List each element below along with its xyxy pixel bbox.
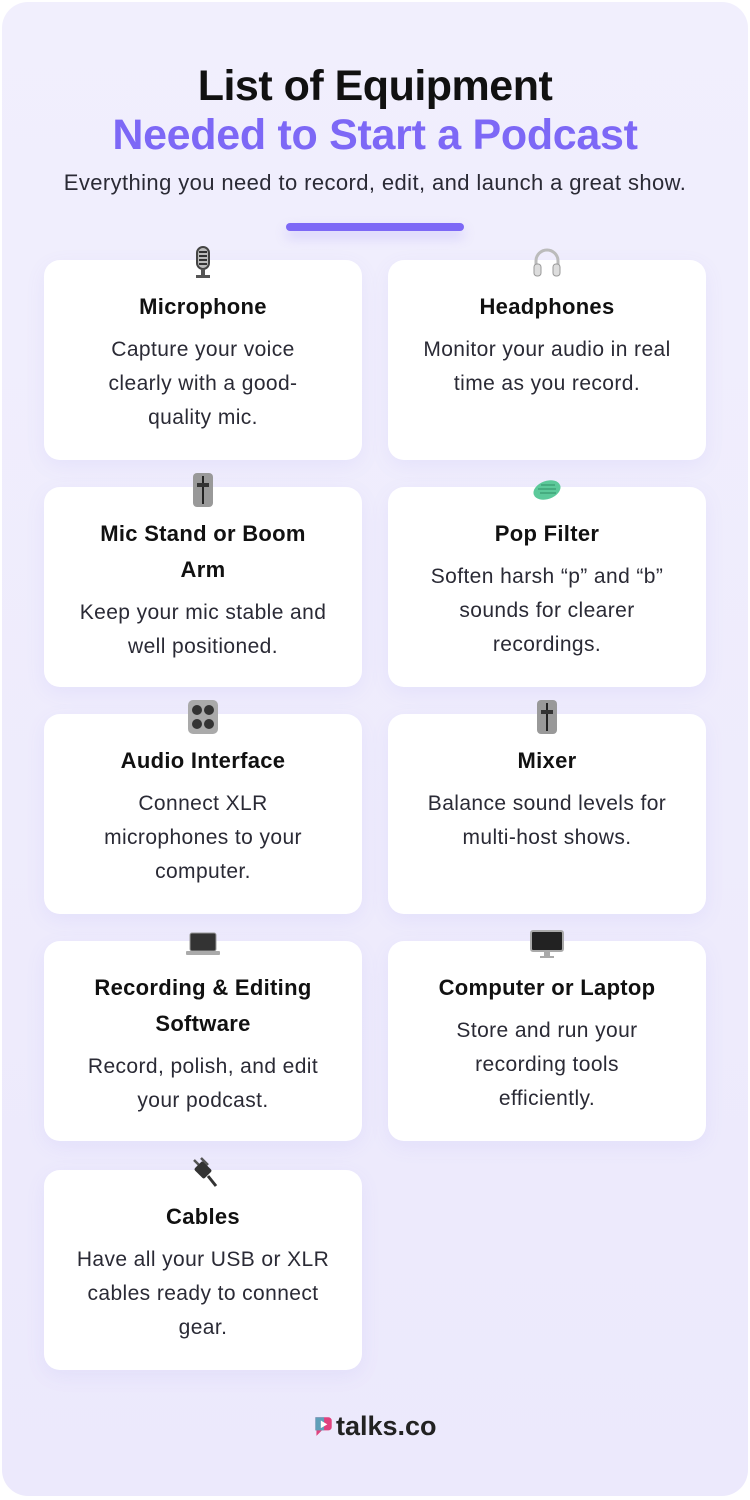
panel: computer: efficiently. [499, 1087, 595, 1110]
panel: cables: Have all your USB or XLR [77, 1248, 329, 1271]
panel: headphones [388, 260, 706, 460]
icon: desktop [530, 930, 564, 958]
panel: microphone: clearly with a good- [109, 372, 297, 395]
panel: microphone [44, 260, 362, 460]
title highlight: Needed to Start a Podcast [112, 111, 638, 159]
panel: audio interface: computer. [155, 860, 251, 883]
panel: computer: recording tools [475, 1053, 619, 1076]
panel: mic stand [44, 487, 362, 687]
icon: stand [193, 473, 213, 507]
panel: cables: Cables [166, 1204, 240, 1229]
panel: pop filter: sounds for clearer [459, 599, 635, 622]
icon: microphone [196, 246, 210, 278]
icon: laptop [186, 932, 220, 955]
panel: cables [44, 1170, 362, 1370]
panel: mic stand: Keep your mic stable and [80, 601, 326, 624]
panel: audio interface: Audio Interface [121, 748, 285, 773]
panel: audio interface: Connect XLR [138, 792, 268, 815]
title: List of Equipment [198, 62, 552, 110]
subtitle: Everything you need to record, edit, and launch a great show. [64, 170, 686, 195]
panel: computer [388, 941, 706, 1141]
icon: mixer [537, 700, 557, 734]
panel: software [44, 941, 362, 1141]
panel: pop filter [388, 487, 706, 687]
panel: software: Record, polish, and edit [88, 1055, 318, 1078]
panel: computer: Computer or Laptop [439, 975, 655, 1000]
panel: microphone: Microphone [139, 294, 267, 319]
accent bar [286, 223, 464, 231]
icon: plug [193, 1157, 218, 1187]
panel: software: your podcast. [137, 1089, 269, 1112]
panel: headphones: time as you record. [454, 372, 640, 395]
panel: software: Recording & Editing [94, 975, 312, 1000]
panel: pop filter: recordings. [493, 633, 601, 656]
panel: headphones: Monitor your audio in real [423, 338, 671, 361]
icon: interface [188, 700, 218, 734]
panel: cables: gear. [179, 1316, 227, 1339]
panel: audio interface: microphones to your [104, 826, 302, 849]
panel: software: Software [155, 1011, 251, 1036]
logo: talks.co [336, 1410, 437, 1440]
panel: mic stand: Mic Stand or Boom [100, 521, 306, 546]
panel: mixer [388, 714, 706, 914]
panel: pop filter: Soften harsh “p” and “b” [431, 565, 663, 588]
panel: mic stand: well positioned. [128, 635, 278, 658]
icon: pop filter [534, 480, 560, 500]
panel: audio interface [44, 714, 362, 914]
panel: pop filter: Pop Filter [495, 521, 599, 546]
panel: mixer: Balance sound levels for [428, 792, 666, 815]
panel: microphone: quality mic. [148, 406, 258, 429]
panel: microphone: Capture your voice [111, 338, 295, 361]
panel: mixer: Mixer [518, 748, 576, 773]
icon: headphones [534, 248, 560, 276]
panel: headphones: Headphones [479, 294, 615, 319]
panel: mic stand: Arm [181, 557, 225, 582]
panel: computer: Store and run your [456, 1019, 638, 1042]
panel: cables: cables ready to connect [87, 1282, 318, 1305]
panel: mixer: multi-host shows. [462, 826, 632, 849]
